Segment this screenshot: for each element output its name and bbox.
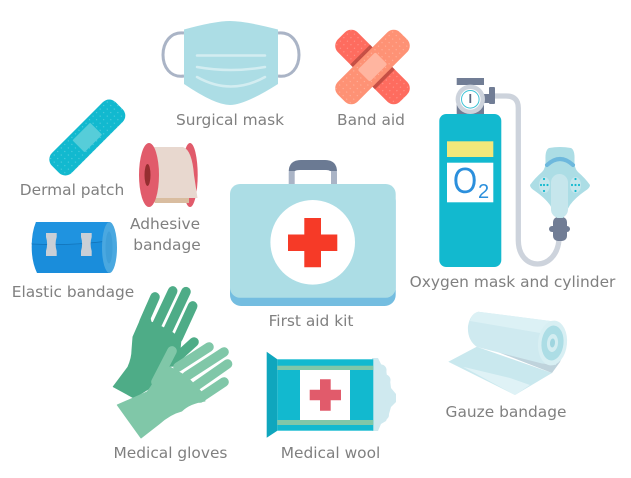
icon: oxygen mask and cylinder: O: [453, 161, 477, 202]
icon: oxygen mask and cylinder: [439, 78, 590, 267]
icon: first aid kit: [230, 160, 396, 306]
icon: medical wool: [267, 352, 396, 438]
icon: surgical mask: [163, 21, 299, 105]
icon: adhesive bandage: [139, 143, 198, 207]
icon: gauze bandage: [448, 312, 569, 395]
label: gauze bandage: Gauze bandage: [446, 403, 566, 421]
icon: medical gloves: [113, 291, 228, 438]
label: oxygen mask and cylinder: Oxygen mask and cylinder: [410, 273, 616, 291]
label: surgical mask: Surgical mask: [176, 111, 284, 129]
label: first aid kit: First aid kit: [269, 312, 353, 330]
label: adhesive bandage: Adhesive: [130, 215, 200, 233]
label: elastic bandage: Elastic bandage: [12, 283, 134, 301]
label: band aid: Band aid: [337, 111, 405, 129]
label: dermal patch: Dermal patch: [20, 181, 124, 199]
label: medical gloves: Medical gloves: [114, 444, 227, 462]
icon: dermal patch: [46, 96, 129, 179]
icon: elastic bandage: [32, 222, 117, 273]
back glove: [113, 291, 194, 398]
label: adhesive bandage: [130, 215, 201, 254]
label: adhesive bandage: bandage: [133, 236, 201, 254]
icon: band aid: [329, 24, 416, 110]
icon: oxygen mask and cylinder: 2: [478, 181, 489, 203]
front glove: [117, 347, 228, 438]
label: medical wool: Medical wool: [281, 444, 380, 462]
